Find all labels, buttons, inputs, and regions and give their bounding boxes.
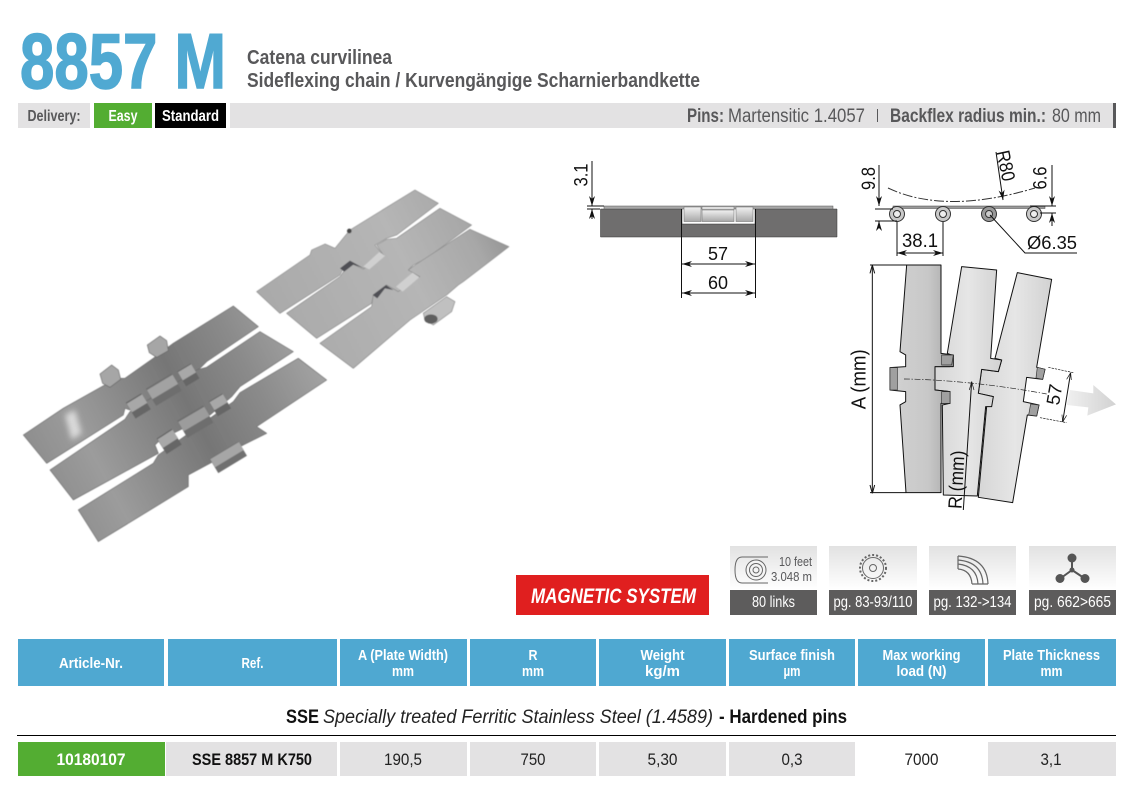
table row: 0,3 xyxy=(782,751,802,769)
hinge tabs xyxy=(890,355,1045,416)
icon box: roll length xyxy=(730,546,817,615)
sideflex top view drawing xyxy=(849,265,1116,510)
hinge barrels xyxy=(129,368,243,466)
delivery and specification bar: 80 mm xyxy=(1052,106,1101,127)
delivery and specification bar: Delivery: xyxy=(28,108,80,125)
top view labels xyxy=(849,349,1066,509)
top view labels: 57 xyxy=(1042,383,1066,407)
front chain section xyxy=(23,306,327,542)
icon box: roll length: 3.048 m xyxy=(771,569,812,584)
backflex labels: 38.1 xyxy=(902,231,938,252)
table header: Max working xyxy=(882,647,960,664)
table row: 7000 xyxy=(904,751,938,769)
plate three xyxy=(978,273,1052,503)
icon box: sprocket: pg. 83-93/110 xyxy=(834,594,913,611)
carrier block xyxy=(600,209,837,237)
section drawing: plate and hinge xyxy=(572,161,837,298)
table header: A (Plate Width) xyxy=(358,647,448,664)
backflex labels: 9.8 xyxy=(859,167,880,190)
icon box: sprocket xyxy=(829,546,917,615)
front chain highlight xyxy=(65,410,82,440)
table header: µm xyxy=(784,663,800,680)
table header: R xyxy=(528,647,538,664)
magnetic system badge: MAGNETIC SYSTEM xyxy=(531,585,696,608)
material heading: SSE xyxy=(286,706,319,728)
table row: 750 xyxy=(520,751,546,769)
backflex drawing xyxy=(859,149,1077,256)
backflex labels: 6.6 xyxy=(1030,166,1052,190)
subtitle: Sideflexing chain / Kurvengängige Scharnierbandkette xyxy=(247,70,700,92)
delivery and specification bar: Pins: xyxy=(687,106,724,127)
plate two xyxy=(935,267,1002,496)
delivery and specification bar: Easy xyxy=(108,108,138,125)
table row: SSE 8857 M K750 xyxy=(192,751,312,769)
table header: Weight xyxy=(640,647,685,664)
dimension labels: 60 xyxy=(708,272,728,293)
top view labels: A (mm) xyxy=(849,349,871,409)
back chain section xyxy=(257,190,509,368)
plate xyxy=(604,206,833,209)
icon box: three-node connector: pg. 662>665 xyxy=(1034,594,1111,611)
title: 8857 M xyxy=(20,17,226,105)
table header: kg/m xyxy=(645,663,680,680)
icon box: three-node connector xyxy=(1029,546,1116,615)
product photo: chain links xyxy=(23,190,509,542)
dimension labels: 3.1 xyxy=(572,164,592,186)
magnetic system badge xyxy=(516,575,709,615)
table header xyxy=(18,639,1116,686)
delivery and specification bar: Backflex radius min.: xyxy=(890,106,1046,127)
table header: Surface finish xyxy=(749,647,835,664)
plate one xyxy=(890,265,953,493)
table header: mm xyxy=(392,663,414,680)
table header: Plate Thickness xyxy=(1003,647,1100,664)
table header: Ref. xyxy=(242,655,264,672)
material heading: Specially treated Ferritic Stainless Steel (1.4589) xyxy=(323,706,713,728)
material heading: - Hardened pins xyxy=(719,706,847,728)
icon box: roll length: 80 links xyxy=(752,594,795,611)
table header: Article-Nr. xyxy=(59,655,123,672)
dimension labels xyxy=(572,164,728,293)
table row: 3,1 xyxy=(1040,751,1062,769)
icon box: curve track: pg. 132->134 xyxy=(934,594,1012,611)
delivery and specification bar: Standard xyxy=(162,108,219,125)
subtitle xyxy=(247,47,700,92)
table header: mm xyxy=(522,663,544,680)
table row xyxy=(18,742,1116,776)
backflex labels: Ø6.35 xyxy=(1027,232,1077,253)
delivery and specification bar xyxy=(18,103,1116,128)
icon box: curve track xyxy=(929,546,1016,615)
backflex labels: R80 xyxy=(991,149,1018,183)
delivery and specification bar: Martensitic 1.4057 xyxy=(728,106,865,127)
table row: 190,5 xyxy=(384,751,422,769)
direction arrow xyxy=(1067,385,1116,416)
table header: mm xyxy=(1040,663,1062,680)
subtitle: Catena curvilinea xyxy=(247,47,393,69)
hinge xyxy=(684,206,753,222)
table header: load (N) xyxy=(896,663,947,680)
top view labels: R (mm) xyxy=(945,450,970,509)
dimension labels: 57 xyxy=(708,243,728,264)
backflex labels xyxy=(859,149,1077,253)
table row: 5,30 xyxy=(648,751,678,769)
table row: 10180107 xyxy=(56,751,126,769)
icon box: roll length: 10 feet xyxy=(779,554,812,569)
pins xyxy=(890,206,1042,222)
hinge tabs xyxy=(100,336,168,387)
